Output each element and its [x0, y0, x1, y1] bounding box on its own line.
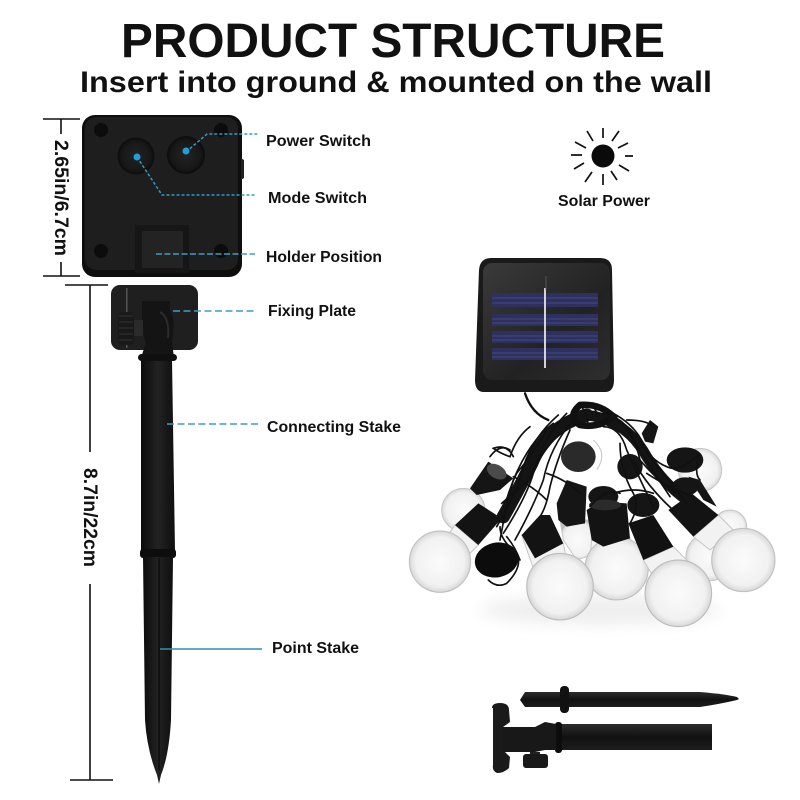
subtitle: Insert into ground & mounted on the wall: [80, 66, 712, 99]
dimension: stake height: 8.7in/22cm: [79, 468, 100, 567]
callout: mode switch: [134, 154, 367, 207]
solar power label: Solar Power: [558, 193, 650, 210]
wire bundle: [488, 393, 700, 585]
dimension: box height: 2.65in/6.7cm: [50, 140, 71, 256]
end cap disk: [472, 538, 522, 582]
callout: point stake: Point Stake: [272, 640, 359, 657]
wire plug: [642, 420, 658, 443]
callout: holder position: Holder Position: [266, 249, 382, 266]
callout: mode switch: Mode Switch: [268, 190, 367, 207]
solar panel: [475, 258, 614, 392]
fixing plate and stake: [111, 285, 198, 784]
bulb: centre: [585, 500, 648, 600]
string light bulbs and wires: [409, 393, 775, 627]
callout: connecting stake: Connecting Stake: [267, 419, 401, 436]
bulb: front right: [628, 515, 712, 627]
detached connecting stake: [492, 703, 712, 773]
callout: power switch: Power Switch: [266, 133, 371, 150]
control box back view: [82, 115, 244, 277]
dimension: stake height: [65, 285, 113, 780]
bulb: front left: [522, 515, 593, 620]
bulb: left: [409, 503, 502, 592]
callout: power switch: [182, 133, 371, 154]
dimension: box height: [43, 119, 80, 276]
detached point stake: [520, 686, 739, 713]
bulb: back right: [668, 493, 775, 592]
dark caps behind: [470, 441, 717, 527]
callout: fixing plate: Fixing Plate: [268, 303, 356, 320]
back bulbs: [442, 440, 747, 581]
title: PRODUCT STRUCTURE: [121, 14, 665, 68]
icon: sun: [571, 128, 633, 185]
